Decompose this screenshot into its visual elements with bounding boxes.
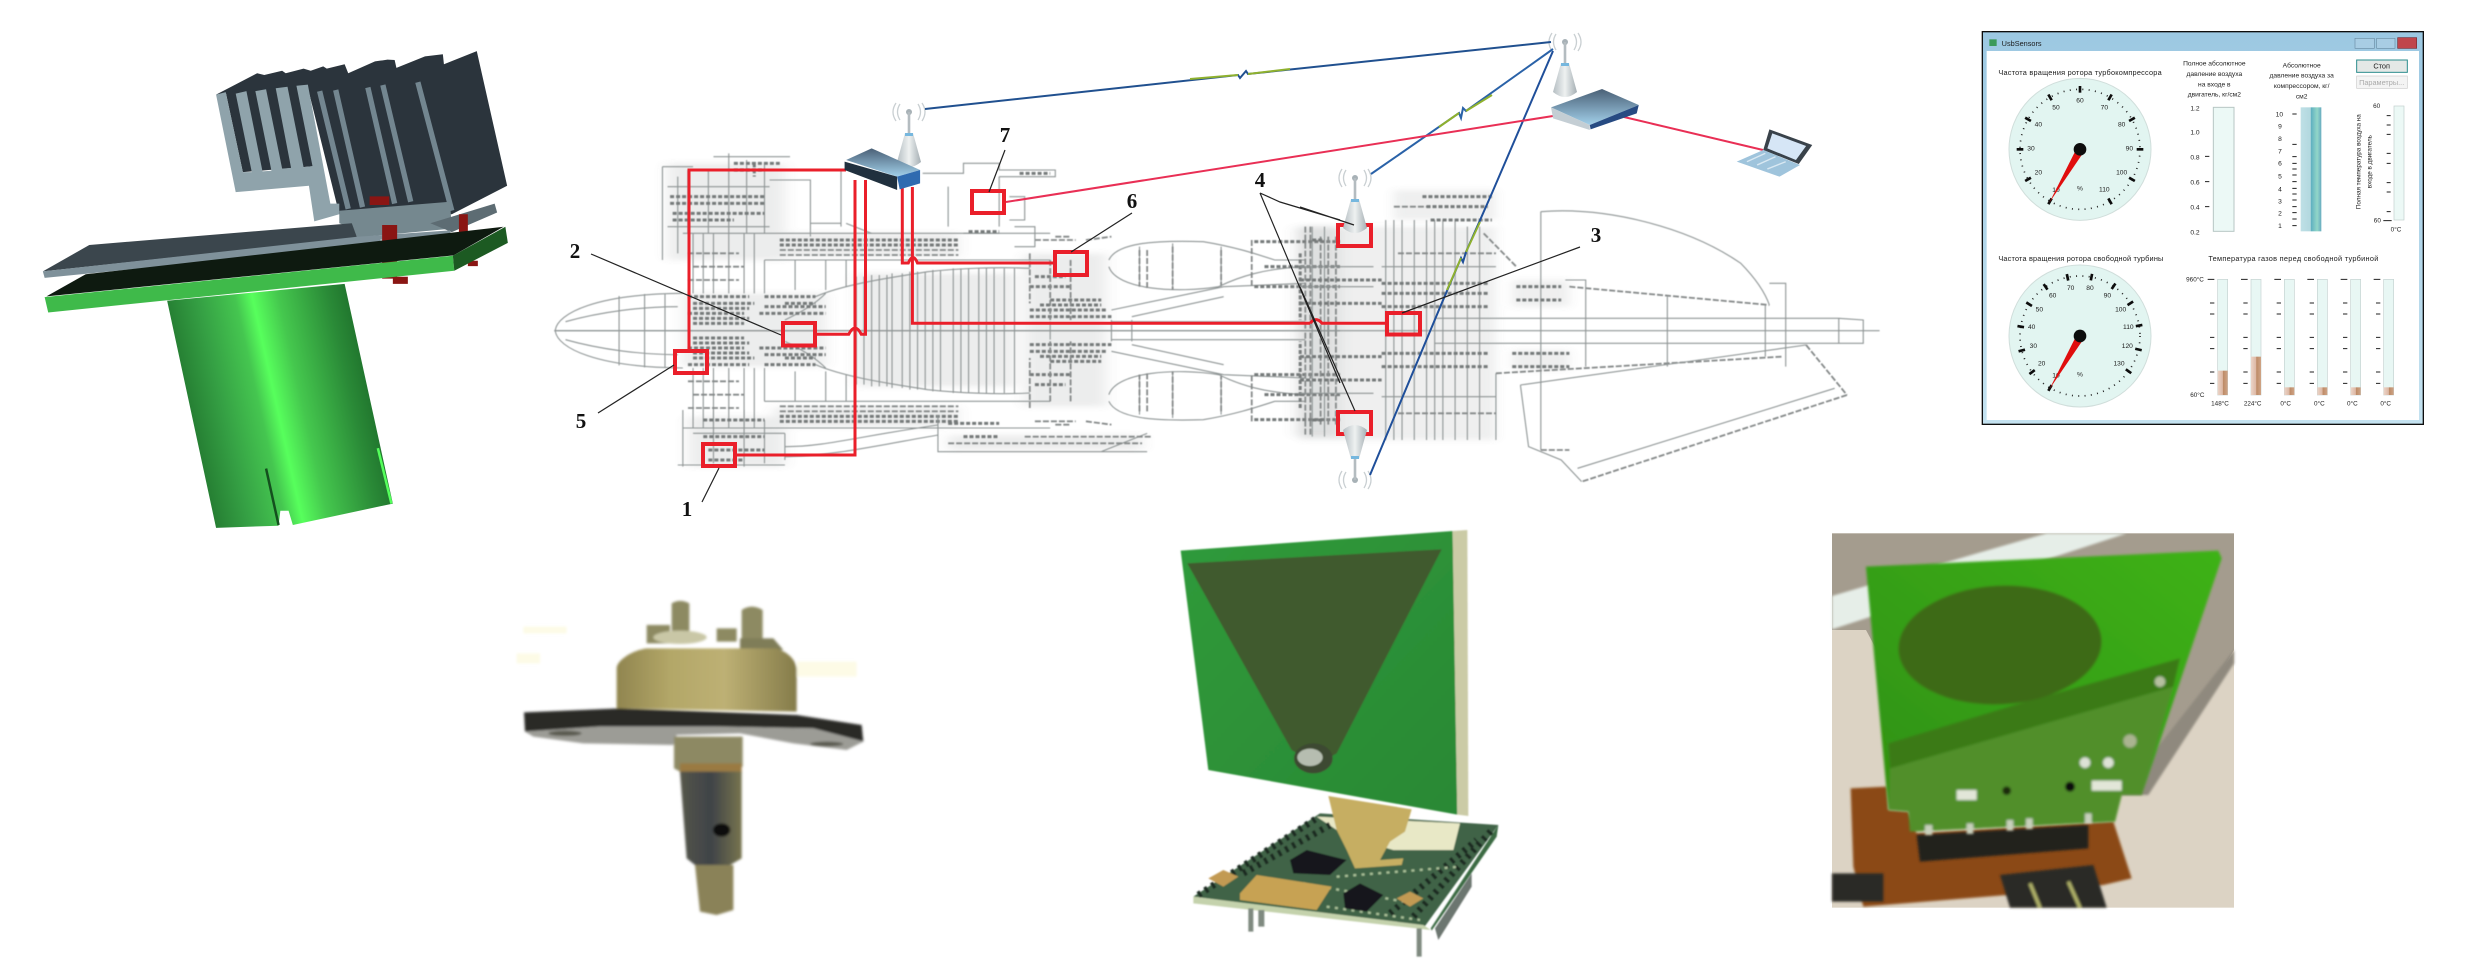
gauge: free turbine rotor speed: 130 bbox=[2113, 361, 2125, 368]
bars: gas temperature before free turbine: Температура газов перед свободной турбиной bbox=[2208, 254, 2378, 263]
gauge: free turbine rotor speed bbox=[1998, 254, 2163, 407]
bar: inlet air total pressure: 1.2 bbox=[2190, 106, 2200, 113]
panel: 3D model of sensor with heat sink bbox=[43, 51, 508, 528]
photo background bbox=[1832, 533, 2234, 908]
bar: inlet air total temperature bbox=[2356, 103, 2404, 233]
bar: inlet air total temperature: 60 bbox=[2373, 103, 2381, 110]
sensor box 6 bbox=[1055, 252, 1087, 275]
bar: air pressure after compressor: 9 bbox=[2278, 123, 2282, 130]
gauge: free turbine rotor speed: Частота вращения ротора свободной турбины bbox=[1998, 254, 2163, 263]
bar: air pressure after compressor: 4 bbox=[2278, 186, 2282, 193]
bar: air pressure after compressor: 3 bbox=[2278, 198, 2282, 205]
panel: photo of triangular antenna sensor board bbox=[1181, 530, 1498, 957]
bars: gas temperature before free turbine: 0°C bbox=[2347, 399, 2358, 407]
bar: air pressure after compressor bbox=[2270, 61, 2334, 231]
soft density shading bbox=[668, 163, 1340, 467]
bar: air pressure after compressor: 6 bbox=[2278, 161, 2282, 168]
sensor box 4 lower bbox=[1338, 412, 1371, 434]
bar: air pressure after compressor: компрессором, кг/ bbox=[2274, 83, 2330, 90]
sensor box 5 bbox=[675, 351, 707, 373]
gauge: turbocompressor rotor speed: 100 bbox=[2116, 170, 2128, 177]
gauge: turbocompressor rotor speed: Частота вращения ротора турбокомпрессора bbox=[1998, 68, 2163, 77]
antenna: upper turbine sensor bbox=[1339, 169, 1371, 233]
bar: inlet air total pressure: 1.0 bbox=[2190, 130, 2200, 137]
icon: engine data hub bbox=[845, 148, 920, 190]
bars: gas temperature before free turbine: 148°C bbox=[2211, 399, 2229, 407]
panel: photo of original metal sensor bbox=[517, 601, 863, 915]
callout numbers: 2 bbox=[570, 239, 580, 263]
gauge: free turbine rotor speed: % bbox=[2077, 372, 2083, 379]
brown carrier board bbox=[1851, 787, 2132, 907]
bars: gas temperature before free turbine: 0°C bbox=[2280, 399, 2291, 407]
upper grey plate bbox=[43, 223, 357, 271]
bar: air pressure after compressor: 1 bbox=[2278, 223, 2282, 230]
bar: inlet air total pressure: двигатель, кг/см2 bbox=[2188, 92, 2241, 99]
gauge: turbocompressor rotor speed: 40 bbox=[2035, 122, 2042, 129]
metal shaft bbox=[674, 737, 743, 915]
gauge: turbocompressor rotor speed: 70 bbox=[2101, 104, 2108, 111]
bars: gas temperature before free turbine: 60°C bbox=[2190, 391, 2205, 399]
turbine core bbox=[1300, 197, 1880, 482]
antenna: receiver bbox=[1549, 33, 1581, 97]
bars: gas temperature before free turbine: 0°C bbox=[2380, 399, 2391, 407]
gauge: turbocompressor rotor speed: 10 bbox=[2052, 187, 2060, 194]
gauge: free turbine rotor speed: 60 bbox=[2049, 292, 2057, 299]
circuit module bbox=[1193, 813, 1498, 957]
bar: inlet air total pressure: 0.6 bbox=[2190, 179, 2200, 186]
bar: air pressure after compressor: 7 bbox=[2278, 149, 2282, 156]
gauge: free turbine rotor speed: 80 bbox=[2086, 285, 2094, 292]
gauge: free turbine rotor speed: 70 bbox=[2067, 285, 2075, 292]
bars: gas temperature before free turbine bbox=[2186, 254, 2394, 407]
callout numbers: 4 bbox=[1255, 168, 1266, 192]
icon: laptop bbox=[1737, 129, 1812, 177]
bar: air pressure after compressor: 5 bbox=[2278, 173, 2282, 180]
bar: inlet air total temperature: 0°C bbox=[2391, 225, 2402, 233]
sensor box 4 upper bbox=[1338, 225, 1371, 246]
bar: air pressure after compressor: давление воздуха за bbox=[2270, 73, 2334, 80]
bar: inlet air total pressure: 0.8 bbox=[2190, 154, 2200, 161]
stop and parameters buttons: Стоп bbox=[2373, 62, 2390, 71]
heat sink bbox=[216, 51, 507, 237]
panel: engine cross-section drawing bbox=[554, 153, 1880, 482]
bar: inlet air total temperature: Полная температура воздуха на bbox=[2356, 114, 2363, 209]
bar: air pressure after compressor: 8 bbox=[2278, 136, 2282, 143]
green antenna PCB bbox=[1866, 551, 2222, 835]
black header bbox=[1832, 825, 2107, 908]
bar: inlet air total pressure bbox=[2183, 60, 2246, 237]
harness rear bbox=[1310, 320, 1385, 323]
gauge: free turbine rotor speed: 110 bbox=[2123, 324, 2134, 331]
bars: gas temperature before free turbine: 224°C bbox=[2244, 399, 2262, 407]
green cylinder housing bbox=[167, 284, 393, 528]
panel: monitoring software window bbox=[1982, 32, 2423, 424]
gauge: free turbine rotor speed: 90 bbox=[2104, 292, 2111, 299]
callout numbers: 1 bbox=[682, 497, 692, 521]
antenna: gateway on engine bbox=[893, 103, 925, 167]
bar: inlet air total pressure: 0.4 bbox=[2190, 204, 2200, 211]
gauge: turbocompressor rotor speed: 60 bbox=[2076, 97, 2084, 104]
soft density shading rear bbox=[1300, 190, 1569, 440]
callout numbers bbox=[570, 123, 1601, 521]
sensor box 1 bbox=[703, 444, 735, 466]
gauge: turbocompressor rotor speed: 90 bbox=[2126, 146, 2133, 153]
gauge: free turbine rotor speed: 20 bbox=[2038, 361, 2046, 368]
sensor box 3 bbox=[1387, 313, 1420, 334]
gauge: turbocompressor rotor speed: 20 bbox=[2035, 170, 2042, 177]
bar: air pressure after compressor: 2 bbox=[2278, 211, 2282, 218]
spacer and bolts bbox=[361, 196, 478, 284]
callout numbers: 6 bbox=[1127, 189, 1137, 213]
link: sensor to router bbox=[1006, 116, 1553, 202]
sensor box 2 bbox=[783, 323, 815, 346]
radio links bbox=[925, 42, 1763, 475]
red sensor wiring bbox=[675, 170, 1420, 466]
link: engine antenna to receiver bbox=[925, 42, 1551, 109]
bar: inlet air total pressure: давление воздуха bbox=[2186, 71, 2242, 78]
bar: inlet air total pressure: Полное абсолютное bbox=[2183, 60, 2246, 68]
gauge: turbocompressor rotor speed: % bbox=[2077, 186, 2083, 193]
gearbox and accessories bbox=[662, 153, 1152, 467]
bar: inlet air total temperature: 60 bbox=[2374, 218, 2381, 225]
callout numbers: 5 bbox=[576, 409, 586, 433]
gauge: free turbine rotor speed: 10 bbox=[2052, 372, 2060, 379]
gauge: turbocompressor rotor speed bbox=[1998, 68, 2163, 220]
window frame: UsbSensors bbox=[2002, 39, 2042, 48]
bars: gas temperature before free turbine: 960°C bbox=[2186, 275, 2204, 283]
bar: air pressure after compressor: см2 bbox=[2296, 93, 2308, 100]
engine front half bbox=[554, 153, 1340, 467]
gauge: turbocompressor rotor speed: 30 bbox=[2027, 146, 2035, 153]
gauge: free turbine rotor speed: 50 bbox=[2036, 306, 2043, 313]
green antenna board bbox=[1181, 530, 1468, 816]
gauge: turbocompressor rotor speed: 50 bbox=[2052, 104, 2060, 111]
bar: air pressure after compressor: Абсолютное bbox=[2283, 61, 2321, 69]
wireless antennas bbox=[893, 33, 1581, 489]
bar: inlet air total temperature: входе в двигатель bbox=[2367, 134, 2374, 188]
leader lines bbox=[591, 150, 1580, 502]
SMA connector bbox=[1328, 796, 1412, 868]
engine rear half bbox=[1300, 190, 1880, 482]
link highlights bbox=[1190, 69, 1492, 290]
link: turbine antenna to receiver bbox=[1371, 49, 1553, 174]
panel: photo of circular antenna sensor prototype bbox=[1832, 533, 2234, 908]
icon: wireless router bbox=[1551, 89, 1639, 130]
bars: gas temperature before free turbine: 0°C bbox=[2314, 399, 2325, 407]
bar: air pressure after compressor: 10 bbox=[2276, 111, 2283, 118]
stop and parameters buttons bbox=[2357, 60, 2407, 88]
lower half mirror bbox=[554, 331, 1340, 435]
metal sensor body and studs bbox=[517, 601, 857, 712]
upper and mirrored core lines bbox=[554, 227, 1340, 331]
gauge: turbocompressor rotor speed: 110 bbox=[2099, 186, 2110, 193]
gauge: turbocompressor rotor speed: 80 bbox=[2118, 122, 2126, 129]
gauge: free turbine rotor speed: 30 bbox=[2030, 343, 2037, 350]
bar: inlet air total pressure: на входе в bbox=[2198, 81, 2231, 88]
callout numbers: 7 bbox=[1000, 123, 1010, 147]
link: lower antenna to receiver bbox=[1370, 51, 1553, 475]
callout numbers: 3 bbox=[1591, 223, 1601, 247]
sensor box 7 bbox=[972, 191, 1004, 213]
stop and parameters buttons: Параметры... bbox=[2359, 78, 2404, 87]
window frame bbox=[1982, 32, 2423, 424]
harness front bbox=[689, 170, 1310, 455]
green circuit board bbox=[45, 227, 508, 312]
bar: inlet air total pressure: 0.2 bbox=[2190, 230, 2200, 237]
gauge: free turbine rotor speed: 120 bbox=[2122, 343, 2133, 350]
link: router to laptop bbox=[1624, 117, 1763, 150]
antenna: lower turbine sensor bbox=[1339, 425, 1371, 489]
metal flange bbox=[524, 708, 863, 750]
gauge: free turbine rotor speed: 100 bbox=[2115, 306, 2127, 313]
gauge: free turbine rotor speed: 40 bbox=[2028, 324, 2036, 331]
